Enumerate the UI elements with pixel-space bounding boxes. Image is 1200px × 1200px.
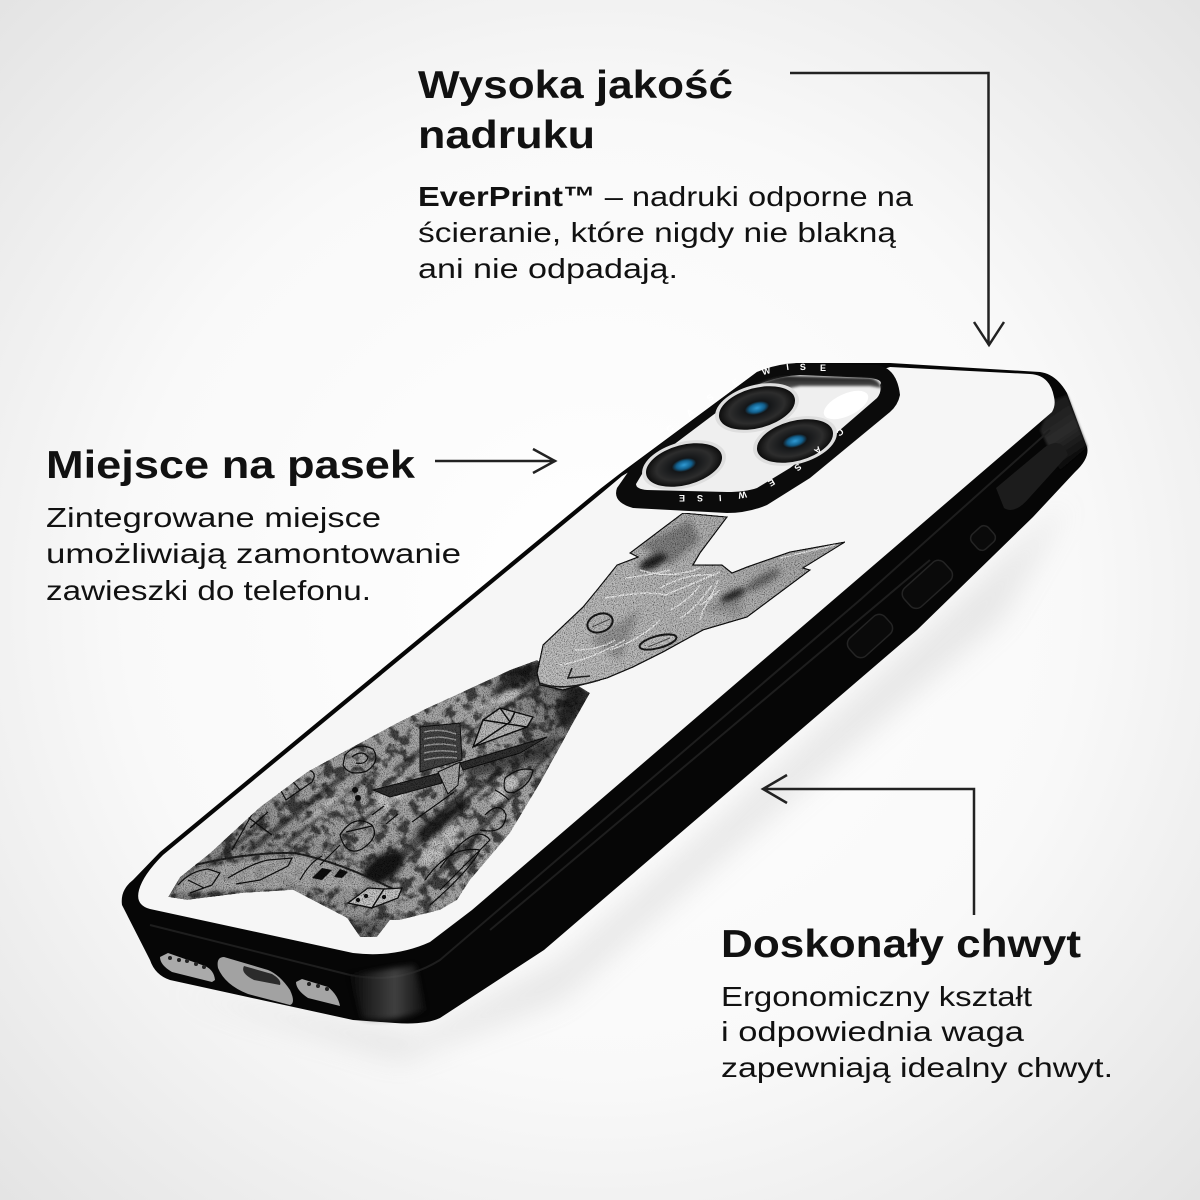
callout: strap slot xyxy=(46,444,555,606)
charging port xyxy=(218,957,293,1005)
left speaker xyxy=(160,953,215,982)
ring lettering: W xyxy=(737,489,748,501)
ring lettering xyxy=(664,362,846,503)
forearm fold line xyxy=(195,853,395,890)
body mottled texture xyxy=(170,662,590,937)
cat nose and mouth xyxy=(540,668,600,687)
phone body xyxy=(122,363,1087,1023)
camera island xyxy=(616,362,900,513)
ring lettering: I xyxy=(719,493,722,503)
ring lettering: S xyxy=(705,392,716,403)
corner gloss xyxy=(350,965,425,1020)
callout: print quality xyxy=(418,64,1004,345)
cat body with tattoos xyxy=(168,660,590,937)
heading: Doskonały chwyt xyxy=(721,923,1081,966)
body text: umożliwiają zamontowanie xyxy=(46,538,461,569)
printed cat artwork xyxy=(160,513,845,950)
head base tone xyxy=(537,513,845,690)
arrow down xyxy=(790,73,1004,345)
right speaker xyxy=(296,979,340,1006)
camera ring xyxy=(616,363,900,513)
ring lettering: E xyxy=(730,377,741,388)
body text: i odpowiednia waga xyxy=(721,1016,1025,1047)
ring lettering: A xyxy=(812,444,824,457)
body text: EverPrint™ – nadruki odporne na xyxy=(418,181,913,212)
heading: Miejsce na pasek xyxy=(46,444,415,487)
ring lettering: I xyxy=(786,362,790,372)
heading: nadruku xyxy=(418,114,595,157)
tattoo dice xyxy=(348,888,402,908)
lens right xyxy=(748,408,842,474)
body text: ścieranie, które nigdy nie blakną xyxy=(418,217,897,248)
body dark shading xyxy=(347,660,590,937)
cat head and ears xyxy=(537,513,845,690)
tattoo eagle xyxy=(373,723,547,797)
ring lettering: C xyxy=(664,422,676,435)
head wrinkles xyxy=(560,545,835,665)
ring lettering: C xyxy=(834,426,846,439)
body text: ani nie odpadają. xyxy=(418,253,678,284)
side switch xyxy=(996,443,1068,510)
heading: Wysoka jakość xyxy=(418,64,733,107)
phone shadow xyxy=(170,500,1070,1060)
ring lettering: A xyxy=(684,406,696,419)
camera window xyxy=(636,375,881,492)
cat eye left xyxy=(585,610,615,636)
tattoo linework xyxy=(178,746,533,905)
ring lettering: W xyxy=(761,365,772,377)
heading xyxy=(418,64,733,157)
callout: grip xyxy=(721,775,1113,1083)
side buttons xyxy=(844,523,998,661)
arrow left xyxy=(763,775,974,915)
ring lettering: E xyxy=(820,363,826,373)
upper right corner sheen xyxy=(1040,395,1087,470)
ring lettering: S xyxy=(792,462,803,473)
lens left xyxy=(637,432,731,498)
tattoo diamond xyxy=(473,708,533,747)
flash highlight xyxy=(820,385,872,425)
body text: Ergonomiczny kształt xyxy=(721,981,1032,1012)
ring lettering: E xyxy=(679,493,685,503)
body directional dark streaks xyxy=(205,690,560,890)
white back plate xyxy=(138,367,1055,954)
body text xyxy=(46,502,461,606)
inner bevel xyxy=(757,376,881,392)
side edge highlight lines xyxy=(150,430,1050,978)
body light patches xyxy=(304,685,524,870)
ring lettering: E xyxy=(766,477,777,488)
phone case xyxy=(122,362,1087,1060)
ring lettering: S xyxy=(697,493,703,503)
arrow right xyxy=(435,449,555,473)
lens top xyxy=(710,375,804,441)
body text xyxy=(721,981,1113,1083)
body base tone xyxy=(168,660,590,937)
body text: zapewniają idealny chwyt. xyxy=(721,1052,1113,1083)
body text: Zintegrowane miejsce xyxy=(46,502,381,533)
forearm light band xyxy=(172,855,393,893)
cat eye right xyxy=(638,631,678,653)
head shading xyxy=(590,520,783,660)
body text xyxy=(418,181,913,284)
tattoo black spots xyxy=(312,787,361,880)
body text: zawieszki do telefonu. xyxy=(46,575,371,606)
ring lettering: S xyxy=(800,362,806,372)
